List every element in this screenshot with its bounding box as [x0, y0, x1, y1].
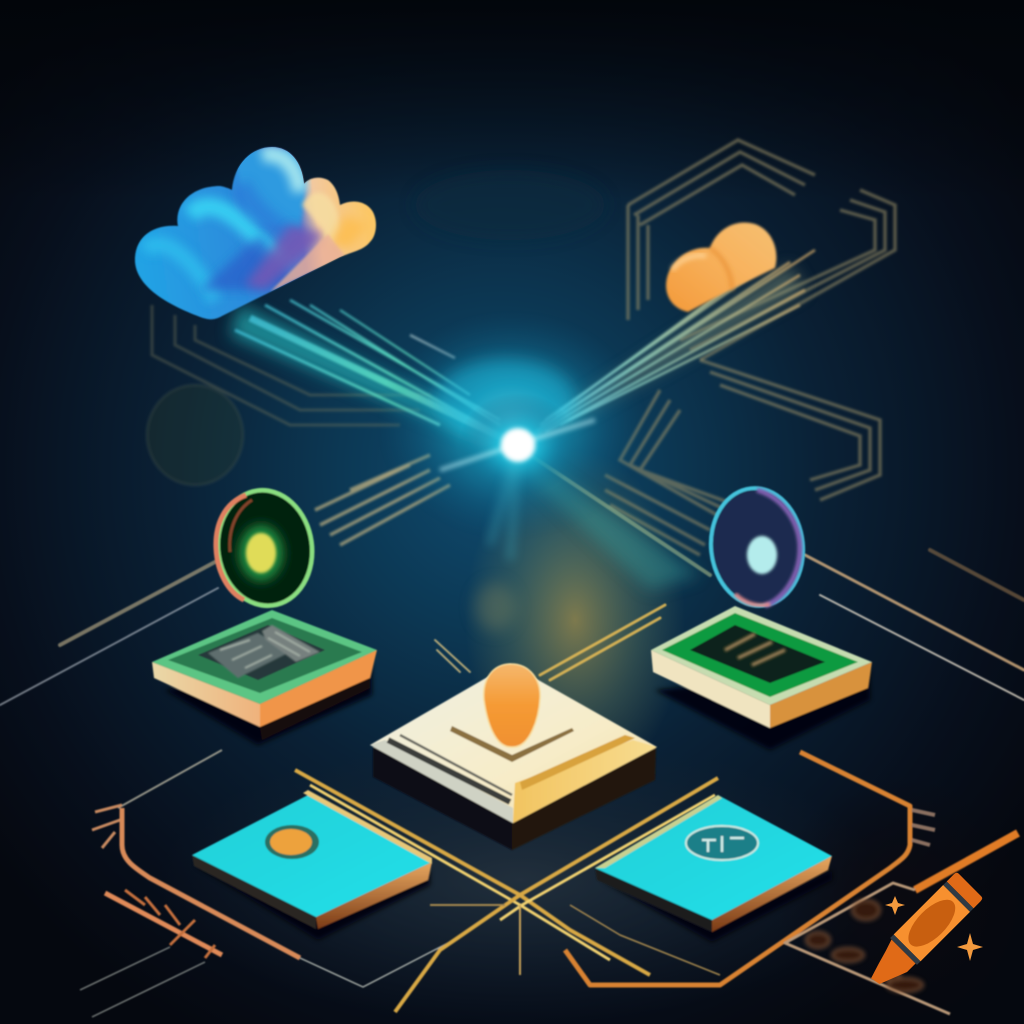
panel: left teal tile	[192, 790, 432, 940]
wide blurred beam glow	[230, 265, 805, 590]
icon: blue cloud	[135, 147, 376, 319]
icon: orange drop on the platform	[484, 664, 540, 747]
converging light beams: right-side set	[530, 250, 815, 438]
panel: right green chip	[651, 606, 872, 750]
panel: left green chip	[152, 610, 377, 745]
floor circuit traces: lower orange and gold lines	[80, 750, 1018, 1017]
faint ghost circuit shapes	[147, 305, 430, 485]
yellow light column below the flare	[465, 450, 685, 790]
beams to the lower left	[315, 455, 450, 545]
converging light beams: left-side set	[235, 300, 518, 445]
icon: left ring disc	[210, 484, 320, 612]
panel: right teal tile	[595, 795, 832, 942]
bottom-right decorative glyph strip	[806, 900, 923, 992]
central light flare	[377, 310, 647, 560]
icon: orange cloud	[666, 222, 776, 312]
panel: central pyramid platform	[370, 664, 657, 850]
icon: crayon logo	[860, 872, 983, 995]
icon: right ring disc	[705, 484, 809, 610]
floor circuit traces: upper lines	[0, 455, 1024, 705]
